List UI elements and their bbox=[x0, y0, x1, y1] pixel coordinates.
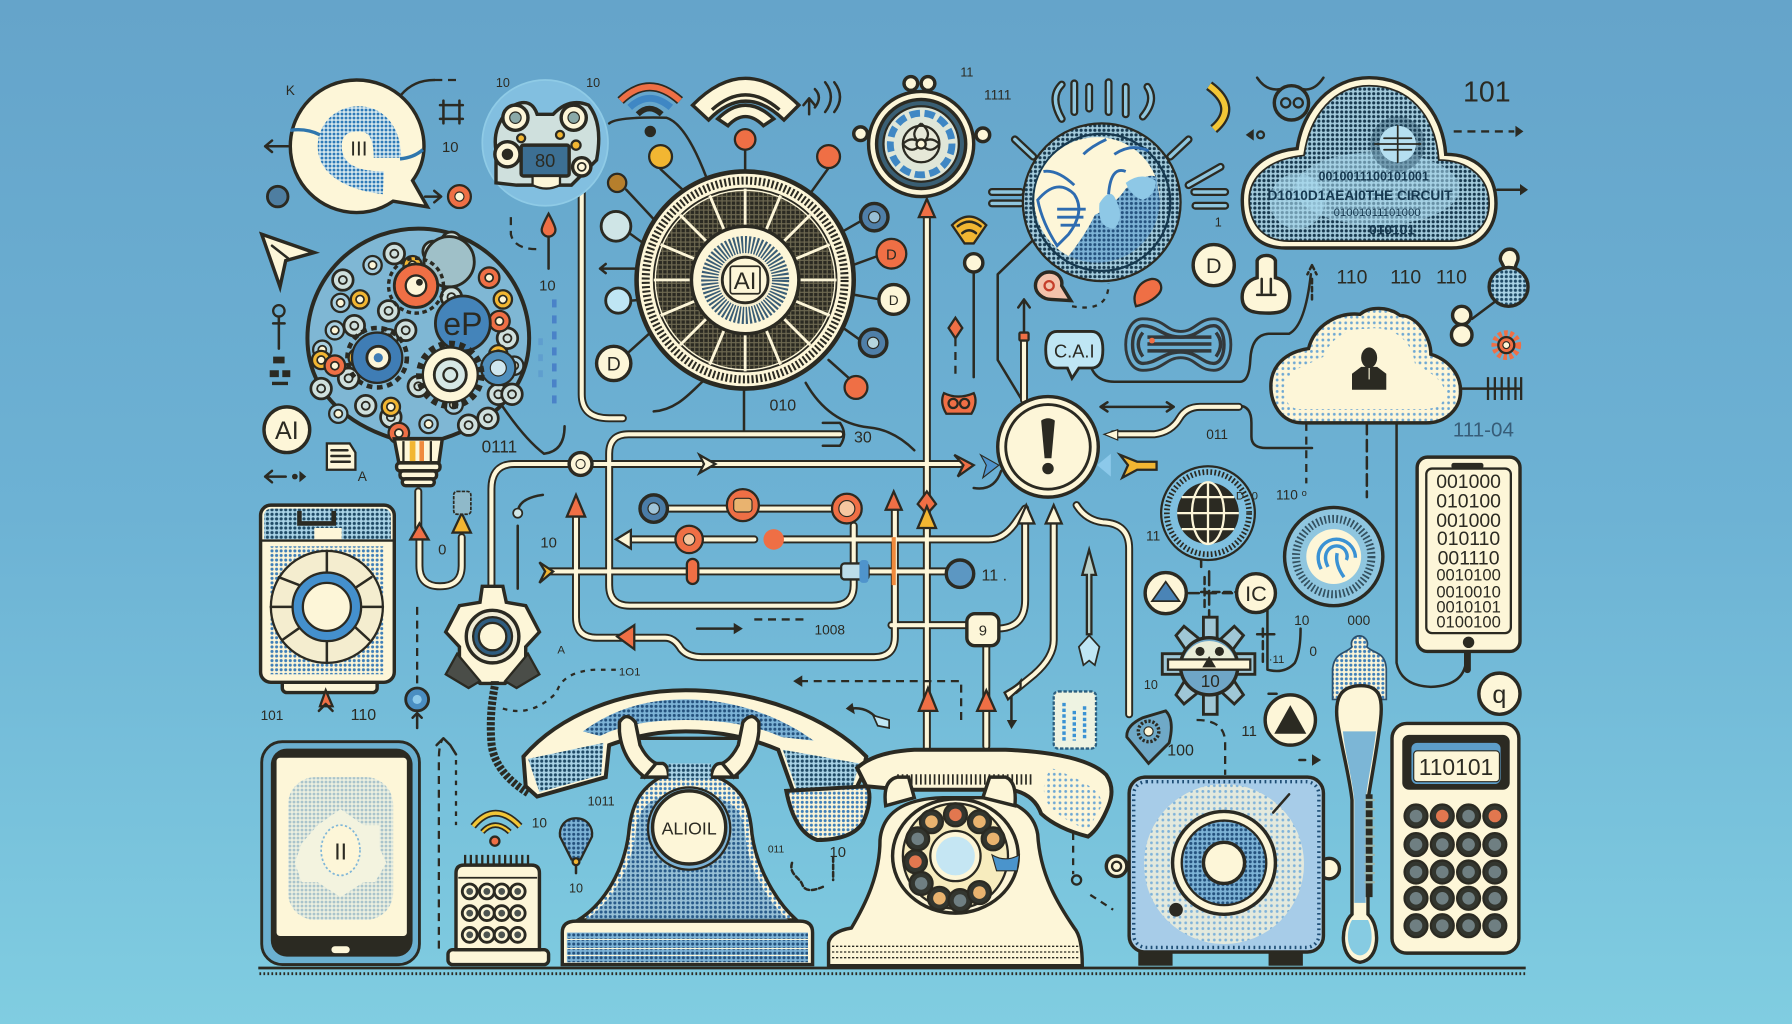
orange up arrow with dashed hook bbox=[511, 214, 555, 269]
binary labels: D bbox=[1236, 490, 1244, 502]
calculator bbox=[1392, 723, 1519, 953]
large data cloud: 01001011101000 bbox=[1334, 207, 1421, 219]
first telephone: ALIOIL bbox=[662, 818, 717, 838]
paragraph badge: q bbox=[1492, 681, 1506, 709]
speaker box bbox=[1106, 777, 1339, 966]
arrows around the hub bbox=[954, 299, 1197, 523]
left device with dial bbox=[261, 505, 394, 711]
orange gear and ticks bbox=[1488, 334, 1521, 400]
right phone with binary: 001000 bbox=[1436, 510, 1501, 532]
small cloud with person bbox=[1271, 308, 1461, 423]
yellow arc and horned face bbox=[1209, 78, 1323, 129]
AI badge: AI bbox=[275, 417, 299, 445]
AI wheel with connected nodes: D bbox=[607, 353, 621, 375]
pipe arrowheads and nodes bbox=[410, 199, 999, 711]
right phone with binary: 001110 bbox=[1438, 548, 1500, 570]
binary labels: 11 bbox=[1146, 529, 1160, 544]
calculator: 110101 bbox=[1419, 754, 1493, 780]
light bulb with gears bbox=[307, 229, 529, 486]
binary labels: 100 bbox=[1167, 742, 1194, 759]
small keypad bbox=[448, 855, 549, 965]
binary labels: 110 bbox=[351, 707, 376, 724]
binary labels: 011 bbox=[768, 845, 784, 856]
paragraph badge bbox=[1479, 673, 1520, 714]
triangle and IC badges bbox=[1145, 571, 1275, 634]
binary labels: 000 bbox=[1347, 613, 1371, 628]
wand microphone with figure bbox=[1333, 636, 1386, 962]
binary labels: 10 bbox=[569, 882, 583, 896]
shield icon bbox=[1127, 711, 1171, 763]
binary labels: 1 bbox=[1215, 215, 1222, 229]
binary labels: 11 bbox=[1241, 724, 1257, 740]
yellow wifi bbox=[473, 813, 520, 846]
globe with spikes bbox=[992, 82, 1225, 281]
AI wheel with connected nodes bbox=[597, 98, 909, 399]
right phone with binary: 0010010 bbox=[1436, 583, 1501, 602]
binary labels: 010 bbox=[770, 397, 796, 414]
binary labels: 1O1 bbox=[619, 666, 640, 678]
mechanical gear: 10 bbox=[1201, 671, 1220, 691]
binary labels: 110 bbox=[1390, 266, 1421, 288]
AI badge bbox=[264, 407, 310, 453]
right phone with binary: 0010100 bbox=[1436, 566, 1501, 585]
AI wheel with connected nodes: AI bbox=[734, 268, 756, 295]
speech bubble icon bbox=[290, 80, 427, 213]
data chip panel bbox=[1054, 691, 1096, 749]
triangle and IC badges: IC bbox=[1245, 581, 1267, 606]
binary labels: 101 bbox=[261, 708, 283, 723]
small wifi, pin, diamond and bow bbox=[942, 217, 986, 414]
binary labels: 11 bbox=[960, 66, 973, 80]
dashed guide lines bbox=[406, 423, 1367, 949]
binary labels: 10 bbox=[442, 140, 459, 156]
binary labels: 1111 bbox=[984, 87, 1011, 102]
right phone with binary: 010100 bbox=[1436, 490, 1501, 512]
pins under the globe bbox=[1035, 272, 1161, 308]
binary labels: 0111 bbox=[482, 437, 517, 457]
CAI speech bubble: C.A.I bbox=[1054, 341, 1095, 362]
first telephone bbox=[523, 690, 866, 965]
teardrop balloon bbox=[560, 818, 592, 873]
gear connector bbox=[446, 586, 539, 688]
medallion bbox=[854, 77, 990, 197]
binary labels: K bbox=[286, 83, 295, 98]
binary labels: 10 bbox=[496, 76, 510, 90]
right phone with binary bbox=[1417, 457, 1520, 670]
thin connector lines bbox=[503, 118, 1520, 687]
pipe arrowheads and nodes: 9 bbox=[979, 623, 987, 639]
binary labels: 0 bbox=[438, 542, 446, 558]
chip orb: 80 bbox=[535, 150, 555, 171]
binary labels: 011 bbox=[1206, 427, 1228, 442]
binary labels: 10 bbox=[1294, 613, 1310, 628]
binary labels: A bbox=[358, 469, 368, 484]
tablet bbox=[262, 742, 419, 965]
binary labels: 10 bbox=[586, 76, 600, 90]
big cloud text and arrows: 101 bbox=[1463, 77, 1511, 109]
D badge and person badge: D bbox=[1206, 253, 1222, 278]
binary labels: 0 bbox=[1309, 644, 1317, 659]
binary labels bbox=[261, 66, 1514, 896]
right phone with binary: 001000 bbox=[1436, 471, 1501, 493]
tablet: II bbox=[334, 838, 347, 864]
dark up arrow with flower bbox=[1079, 550, 1099, 665]
CAI speech bubble bbox=[1046, 331, 1103, 378]
binary labels: 1008 bbox=[814, 622, 845, 637]
chip orb bbox=[482, 80, 608, 206]
large data cloud: 0010011100101001 bbox=[1319, 170, 1429, 184]
large data cloud bbox=[1242, 78, 1496, 248]
binary labels: 111-04 bbox=[1453, 419, 1514, 442]
small sound arcs bbox=[815, 82, 840, 112]
right phone with binary: 010110 bbox=[1437, 528, 1500, 550]
binary labels: A bbox=[557, 645, 565, 657]
exclamation hub bbox=[998, 397, 1098, 497]
pipe network bbox=[418, 167, 1239, 749]
right phone with binary: 0010101 bbox=[1436, 598, 1501, 617]
binary labels: 0 bbox=[1252, 490, 1258, 502]
mechanical gear bbox=[1162, 617, 1274, 714]
big cloud text and arrows bbox=[1246, 77, 1528, 195]
colored wifi icon bbox=[621, 87, 680, 114]
small globe bbox=[1161, 466, 1255, 560]
second telephone bbox=[786, 750, 1112, 966]
binary labels: 110 bbox=[1436, 266, 1467, 288]
binary labels: 110 ᵒ bbox=[1276, 487, 1307, 502]
binary labels: 11 . bbox=[982, 568, 1007, 585]
small icons and arrows, top left bbox=[262, 80, 471, 385]
D badge and person badge bbox=[1193, 245, 1290, 313]
binary labels: 10 bbox=[829, 845, 846, 861]
binary labels: 10 bbox=[539, 278, 556, 294]
AI wheel with connected nodes: D bbox=[886, 247, 897, 263]
fingerprint disc bbox=[1285, 507, 1383, 606]
document and arrow icons bbox=[265, 443, 355, 482]
oval coil icon bbox=[1126, 319, 1231, 370]
large data cloud: 010101 bbox=[1369, 222, 1415, 237]
coiled cord bbox=[491, 681, 528, 793]
baseline bbox=[258, 968, 1526, 974]
blue dashed column bbox=[538, 299, 557, 403]
light bulb with gears: eP bbox=[443, 306, 482, 342]
binary labels: ·11 bbox=[1269, 654, 1284, 666]
binary labels: 10 bbox=[1144, 678, 1158, 692]
binary labels: 110 bbox=[1337, 266, 1368, 288]
black triangle badge bbox=[1265, 695, 1315, 745]
small coil bbox=[791, 857, 833, 890]
binary labels: 10 bbox=[540, 535, 557, 551]
binary labels: 1011 bbox=[588, 795, 615, 809]
speech bubble icon: III bbox=[350, 137, 367, 160]
AI wheel with connected nodes: D bbox=[889, 293, 899, 308]
right phone with binary: 0100100 bbox=[1436, 612, 1501, 631]
binary labels: 30 bbox=[854, 429, 872, 446]
binary labels: 10 bbox=[532, 815, 547, 830]
cream wifi icon bbox=[693, 78, 799, 126]
large data cloud: D1010D1AEAI0THE CIRCUIT bbox=[1267, 188, 1453, 203]
spike icon and small ball bbox=[1307, 249, 1528, 345]
